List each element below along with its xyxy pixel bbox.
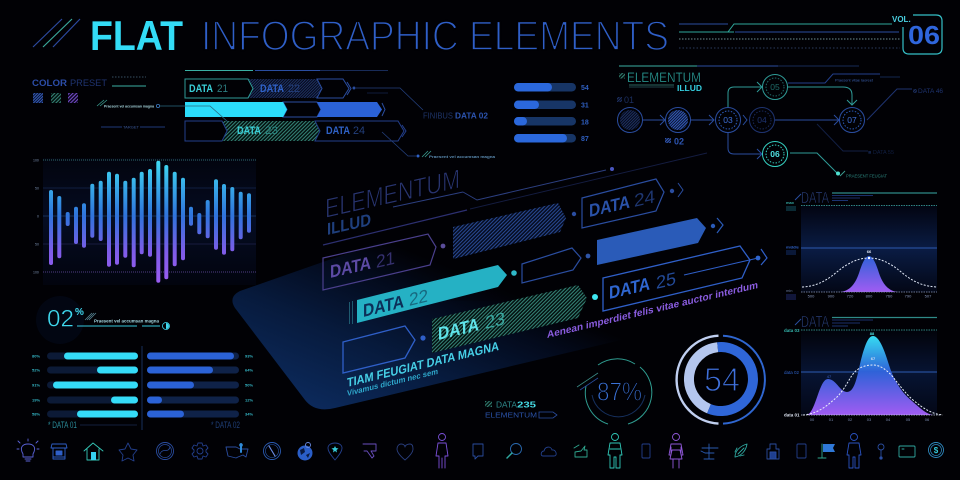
bell labels (786, 200, 932, 300)
area chart heading (795, 314, 937, 331)
data 01 bars (32, 352, 138, 430)
bell labels: 500 (808, 294, 815, 298)
icon: woman purple (436, 434, 448, 468)
data 02 bars (147, 352, 253, 430)
data 02 bars: 50% (245, 382, 253, 388)
area labels: 02 (848, 417, 853, 422)
box: data 21: DATA (330, 252, 371, 282)
label: data235 elementum: ELEMENTUM (485, 410, 537, 420)
caption: tiam feugiat: Vivamus dictum nec sem (347, 367, 438, 398)
box: data 24 (582, 179, 683, 228)
leader: finibus data 02 (352, 86, 489, 120)
box: data 23: 23 (485, 307, 505, 333)
data 02 bars: 64% (245, 368, 253, 372)
area labels: 03 (867, 417, 872, 422)
box: data 21 (323, 234, 445, 290)
box: data 25: DATA (609, 273, 650, 303)
box: data 23: DATA (438, 313, 479, 344)
icon: heart (397, 444, 413, 460)
label: data235 elementum: 235 (517, 400, 536, 410)
box: data 22: DATA (363, 290, 404, 321)
icon: building (767, 444, 779, 459)
percent stat 02%: % (75, 307, 84, 318)
wave axis labels: 0 (37, 214, 39, 218)
bell labels: 900 (828, 294, 835, 298)
icon: globe outline (156, 442, 174, 460)
box: empty lower (343, 326, 426, 373)
box: solid blue (572, 212, 723, 265)
row 3 arrows: DATA (326, 125, 350, 137)
percent stat 02% (36, 296, 170, 344)
icon: signpost (701, 444, 718, 459)
area labels: 88 (870, 331, 875, 336)
data 01 bars: 80% (32, 354, 40, 358)
wave axis labels: 100 (33, 158, 39, 162)
color preset: PRESET (70, 78, 107, 89)
target label: TARGET (123, 124, 140, 130)
icon: earth pin (298, 442, 312, 460)
bell labels: middle (786, 244, 800, 250)
box: data 23 (432, 285, 598, 353)
box: empty mid (522, 248, 590, 283)
flow network (617, 66, 943, 178)
node 04: 04 (757, 115, 767, 125)
row 3 arrows: 23 (265, 125, 278, 137)
arrow flow diagram (97, 70, 496, 159)
box: data 24: 24 (634, 185, 655, 211)
bell labels: 507 (925, 294, 932, 298)
icon: woman violet (669, 434, 683, 468)
node 06 (762, 142, 788, 166)
bell chart heading: DATA (801, 190, 829, 207)
icon: bulb (17, 439, 39, 461)
icon: tablet (797, 444, 806, 458)
node 03 (716, 108, 740, 132)
central perspective panel (232, 153, 791, 409)
title: FLAT (90, 12, 183, 59)
icon: coin: $ (934, 446, 939, 455)
node 07 (840, 108, 864, 132)
node 02 (665, 108, 690, 146)
flow labels: PRAESENT FEUGIAT (846, 174, 887, 178)
color preset: COLOR (32, 78, 67, 89)
flow labels: ■ DATA 55 (868, 150, 894, 156)
gauge: 54 (677, 336, 765, 424)
area fill (807, 336, 933, 415)
data 01 bars: * DATA 01 (48, 420, 77, 430)
progress bars (514, 83, 589, 143)
icon: house (84, 443, 103, 460)
horizontal bar chart: data 01 and 02 (32, 346, 253, 430)
flow heading (619, 69, 702, 93)
area labels: 01 (829, 417, 834, 422)
data 01 bars: 91% (32, 382, 40, 388)
icon: phone (642, 444, 650, 458)
volume badge: VOL. (892, 15, 911, 24)
icon: monitor (899, 446, 915, 457)
area dashed curve (803, 365, 943, 415)
box: data 24: DATA (589, 191, 630, 221)
icon: pin star (328, 443, 342, 460)
panel background (232, 170, 791, 409)
bell labels: max (786, 200, 795, 205)
icon: gear (192, 443, 208, 459)
wave axis labels: 50 (35, 242, 39, 246)
area labels: 06 (925, 417, 930, 422)
percent stat 02%: 02 (47, 306, 74, 332)
flow labels: DATA 46 (918, 88, 943, 95)
target label (101, 124, 165, 130)
caption: tiam feugiat: TIAM FEUGIAT DATA MAGNA (347, 339, 499, 390)
leader: praesent right (382, 132, 496, 159)
panel heading: ILLUD (327, 209, 371, 239)
row 1 arrows: 21 (217, 83, 228, 95)
data 02 bars: 12% (245, 398, 253, 402)
wave bar chart (33, 158, 256, 285)
bell chart heading (795, 190, 937, 207)
icon: chat (473, 444, 483, 459)
wave bars (51, 163, 249, 281)
label: data235 elementum: DATA (496, 400, 517, 410)
icon: magnifier (507, 444, 522, 458)
panel heading: ELEMENTUM (325, 163, 460, 224)
icon: man blue (847, 434, 861, 468)
icon: rocket (735, 444, 747, 457)
bell labels: 720 (847, 294, 854, 298)
row 3 arrows (185, 121, 406, 141)
row 3 arrows: DATA (237, 125, 261, 137)
bell labels: 790 (905, 294, 912, 298)
icon: coin (928, 442, 944, 458)
caption: aenean: Aenean imperdiet felis vitae auctor interdum (547, 280, 758, 341)
node 07: 07 (847, 115, 857, 125)
data 02 bars: 34% (245, 412, 253, 416)
area labels: 67 (871, 356, 876, 361)
gauge: 87% (577, 359, 652, 424)
bell chart (786, 190, 937, 300)
box: data 25: 25 (656, 268, 676, 293)
bell dashed curve (802, 258, 937, 287)
icon: store (51, 444, 67, 459)
area labels: 00 (810, 417, 815, 422)
wave axis labels (33, 158, 39, 274)
node 05: 05 (770, 82, 780, 92)
area labels: data 01 (784, 412, 800, 418)
percent stat 02%: Praesent vel accumsan magna (94, 318, 159, 324)
gauge: 54: 54 (704, 361, 740, 398)
icon: pin needle (878, 444, 884, 459)
icon: star (119, 443, 137, 461)
bell labels: 760 (886, 294, 893, 298)
area labels (784, 328, 930, 422)
row 1 arrows (185, 79, 351, 98)
row 2 arrows (185, 102, 385, 117)
area labels: 04 (886, 417, 891, 422)
icon: man teal (608, 434, 622, 468)
flow heading: ILLUD (677, 83, 702, 93)
area labels: 47 (827, 374, 832, 379)
flow labels: Praesent vitae laoreet (835, 78, 873, 82)
area chart heading: DATA (801, 314, 829, 331)
node 06: 06 (770, 149, 780, 159)
flow labels (835, 78, 943, 178)
panel heading (323, 153, 707, 245)
icon: compass (264, 442, 280, 460)
data 01 bars: 52% (32, 368, 40, 372)
volume badge (679, 15, 942, 54)
row 1 arrows: 22 (288, 83, 300, 95)
wave axis labels: 100 (33, 270, 39, 274)
node 01 (617, 95, 642, 132)
leader: praesent left: Praesent vel accumsan magna (104, 104, 155, 108)
box: data 21: 21 (376, 247, 395, 272)
progress bars: 18 (581, 120, 589, 126)
title: INFOGRAPHIC ELEMENTS (201, 12, 669, 59)
leader: praesent right: Praesent vel accumsan magna (429, 155, 496, 159)
data 02 bars: * DATA 02 (211, 420, 240, 430)
bell labels: 800 (866, 294, 873, 298)
node 02: 02 (674, 136, 684, 146)
bell fill (840, 256, 898, 292)
area labels: data 02 (784, 370, 800, 375)
box: data 25 (603, 246, 767, 311)
node 04 (750, 108, 774, 132)
volume badge: 06 (908, 20, 940, 50)
bell labels: 66 (867, 249, 872, 254)
icon: flag (818, 444, 835, 458)
data 01 bars: 19% (32, 398, 40, 402)
icon: map pin (226, 443, 248, 458)
area labels: data 03 (784, 328, 800, 333)
data 02 bars: 93% (245, 354, 253, 358)
icon: cloud (541, 447, 556, 456)
progress bars: 31 (581, 102, 589, 110)
progress bars: 87 (581, 136, 589, 143)
connectors (643, 74, 912, 173)
node 03: 03 (723, 115, 733, 125)
label: data235 elementum (485, 400, 557, 420)
title (33, 12, 669, 59)
leader: finibus data 02: DATA 02 (455, 112, 489, 120)
node 05 (762, 74, 788, 100)
box: hatched blue (453, 203, 566, 259)
progress bars: 54 (581, 85, 589, 92)
box: data 22: 22 (409, 285, 428, 310)
flow heading: ELEMENTUM (627, 69, 701, 85)
color preset (32, 77, 146, 103)
box: data 22 (350, 265, 517, 324)
wave axis labels: 50 (35, 186, 39, 190)
bell labels: min (786, 288, 792, 293)
area labels: 05 (906, 417, 911, 422)
row 1 arrows: DATA (189, 83, 213, 95)
leader: praesent left (97, 100, 228, 122)
icon: hand (574, 445, 587, 457)
row 1 arrows: DATA (260, 83, 284, 95)
icon: thumb (363, 444, 376, 458)
gauge: 87%: 87% (597, 376, 642, 406)
area chart (784, 314, 943, 422)
node 01: 01 (624, 95, 634, 105)
data 01 bars: 58% (32, 412, 40, 416)
leader: finibus data 02: FINIBUS (423, 112, 453, 120)
row 3 arrows: 24 (353, 125, 365, 137)
icon row (17, 434, 944, 468)
